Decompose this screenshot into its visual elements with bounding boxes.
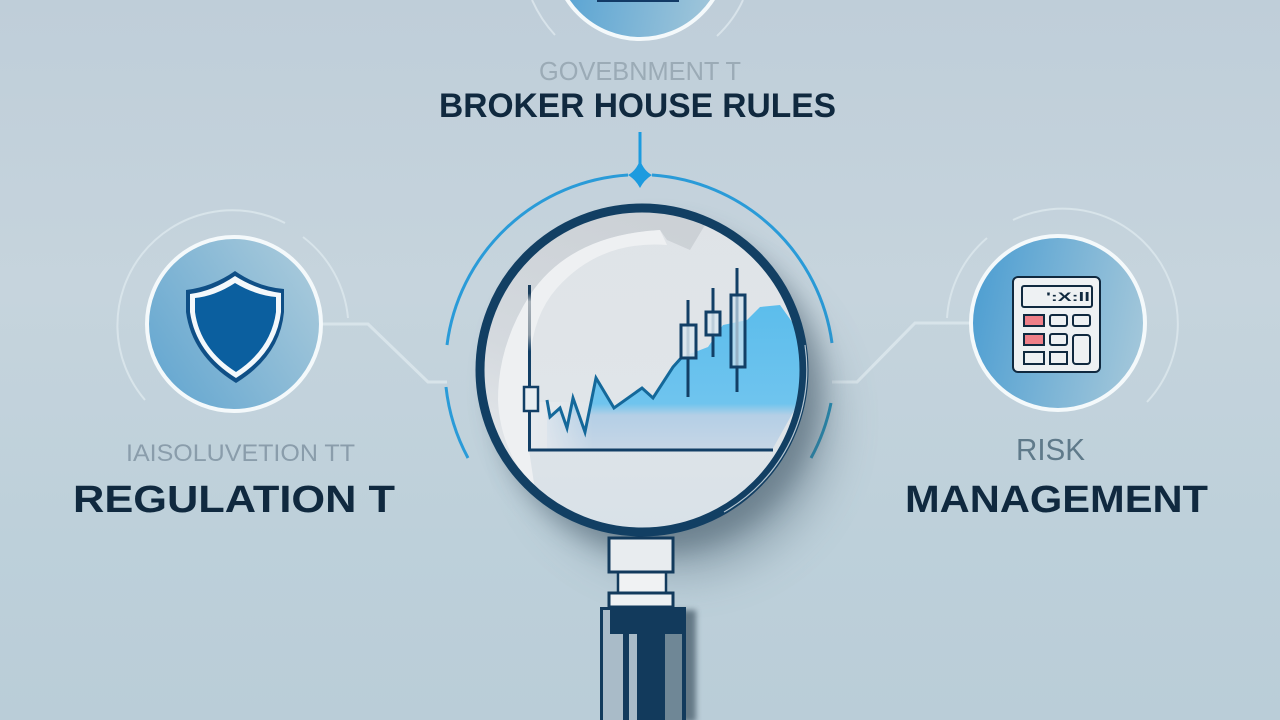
chart: blue area xyxy=(547,305,804,450)
magnifier shadow xyxy=(491,223,830,720)
heading: broker house rules: BROKER HOUSE RULES xyxy=(439,87,836,125)
icon: calculator xyxy=(1013,277,1100,372)
icon: shield xyxy=(186,271,284,383)
regulation t heading: REGULATION T xyxy=(73,479,395,521)
magnifier handle xyxy=(600,538,686,720)
chart: horizontal axis xyxy=(528,448,773,452)
chart: candle one xyxy=(681,300,696,397)
node: government, top circle xyxy=(532,0,743,39)
blue arcs around lens xyxy=(446,175,832,458)
government label: GOVEBNMENT T xyxy=(539,56,741,86)
chart: left candle xyxy=(524,387,538,411)
chart: area fade xyxy=(531,404,581,448)
chart: vertical axis xyxy=(528,285,531,451)
magnifier lens xyxy=(480,200,807,532)
chart: candle three xyxy=(731,268,745,392)
node: risk management, calculator circle xyxy=(832,209,1178,410)
regulation t sublabel: IAISOLUVETION TT xyxy=(126,440,355,467)
glass highlight crescent xyxy=(498,230,667,490)
icon: calculator: ':X:ll xyxy=(1046,290,1090,304)
node: regulation t, shield circle xyxy=(117,210,447,411)
management heading: MANAGEMENT xyxy=(905,479,1208,521)
glass rim cap xyxy=(485,212,704,372)
chart: candle two xyxy=(706,288,720,357)
chart: price line xyxy=(547,357,682,432)
risk sublabel: RISK xyxy=(1016,432,1085,467)
connector: top stem and diamond xyxy=(628,132,652,188)
